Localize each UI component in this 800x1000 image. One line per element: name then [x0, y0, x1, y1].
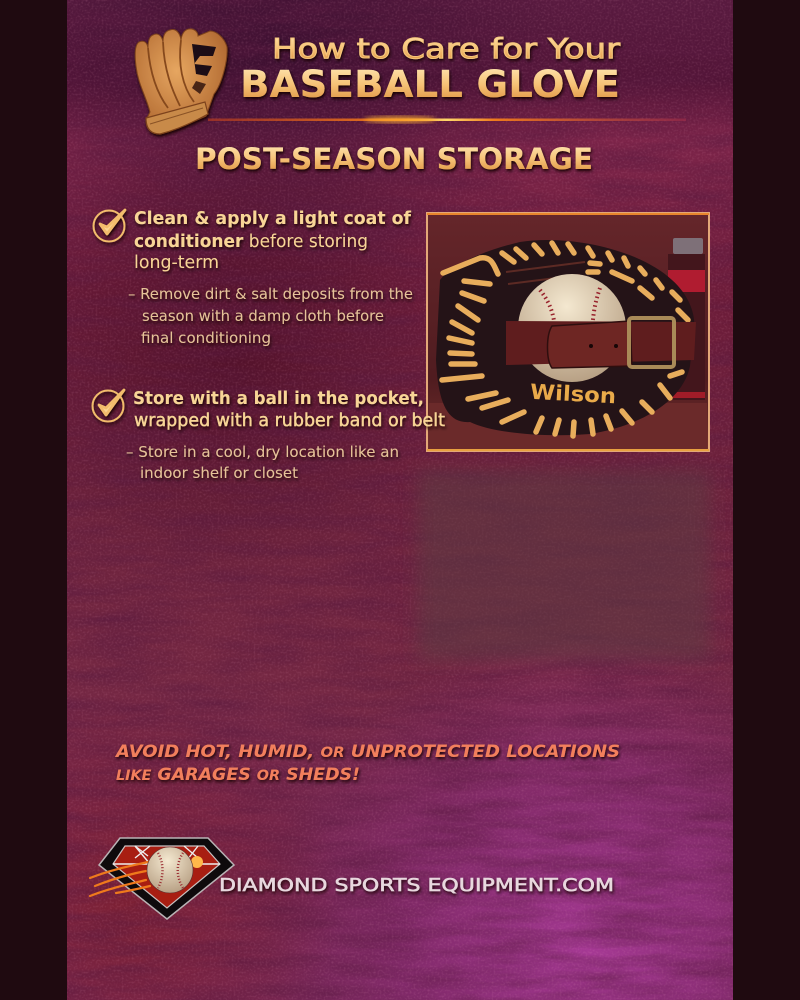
product photo: glove with ball and belt — [427, 213, 709, 451]
table — [429, 403, 707, 449]
tip 1 detail: season with a damp cloth before — [142, 307, 384, 325]
tip 2 — [92, 389, 445, 482]
warning callout — [114, 742, 620, 785]
laces — [442, 243, 688, 436]
tip 2 heading: wrapped with a rubber band or belt — [134, 411, 445, 431]
website name: DIAMOND SPORTS EQUIPMENT.COM — [219, 875, 614, 896]
icon: vintage baseball glove — [135, 29, 227, 134]
tip 2 detail — [126, 443, 399, 482]
tip 2 detail: – Store in a cool, dry location like an — [126, 443, 399, 461]
title — [240, 32, 621, 106]
tip 2 heading — [133, 389, 445, 431]
glowing divider — [208, 116, 686, 123]
webbing straps — [506, 262, 585, 284]
logo: diamond with baseball — [90, 838, 234, 919]
tip 1 detail: – Remove dirt & salt deposits from the — [128, 285, 413, 303]
tip 1 — [94, 209, 413, 347]
tip 1 detail: final conditioning — [141, 329, 271, 347]
icon: check mark 2 — [92, 390, 124, 422]
icon: check mark 1 — [94, 210, 125, 242]
tip 2 heading: Store with a ball in the pocket, — [133, 389, 424, 409]
tip 1 heading: conditioner before storing — [134, 232, 368, 252]
tip 1 heading: Clean & apply a light coat of — [134, 209, 411, 229]
tip 1 heading — [134, 209, 411, 273]
tip 1 detail — [128, 285, 413, 347]
section heading: POST-SEASON STORAGE — [195, 142, 593, 176]
bottle — [668, 238, 705, 400]
glove brand mark: Wilson — [529, 380, 617, 408]
title line 1: How to Care for Your — [272, 32, 621, 65]
warning callout: LIKE GARAGES OR SHEDS! — [116, 765, 360, 785]
tip 1 heading: long-term — [134, 253, 219, 273]
title line 2: BASEBALL GLOVE — [240, 63, 620, 106]
tip 2 detail: indoor shelf or closet — [140, 464, 298, 482]
belt — [506, 318, 696, 368]
glove body — [436, 240, 694, 435]
motion flames — [90, 862, 150, 896]
warning callout: AVOID HOT, HUMID, OR UNPROTECTED LOCATIONS — [114, 742, 620, 762]
baseball — [518, 274, 626, 382]
